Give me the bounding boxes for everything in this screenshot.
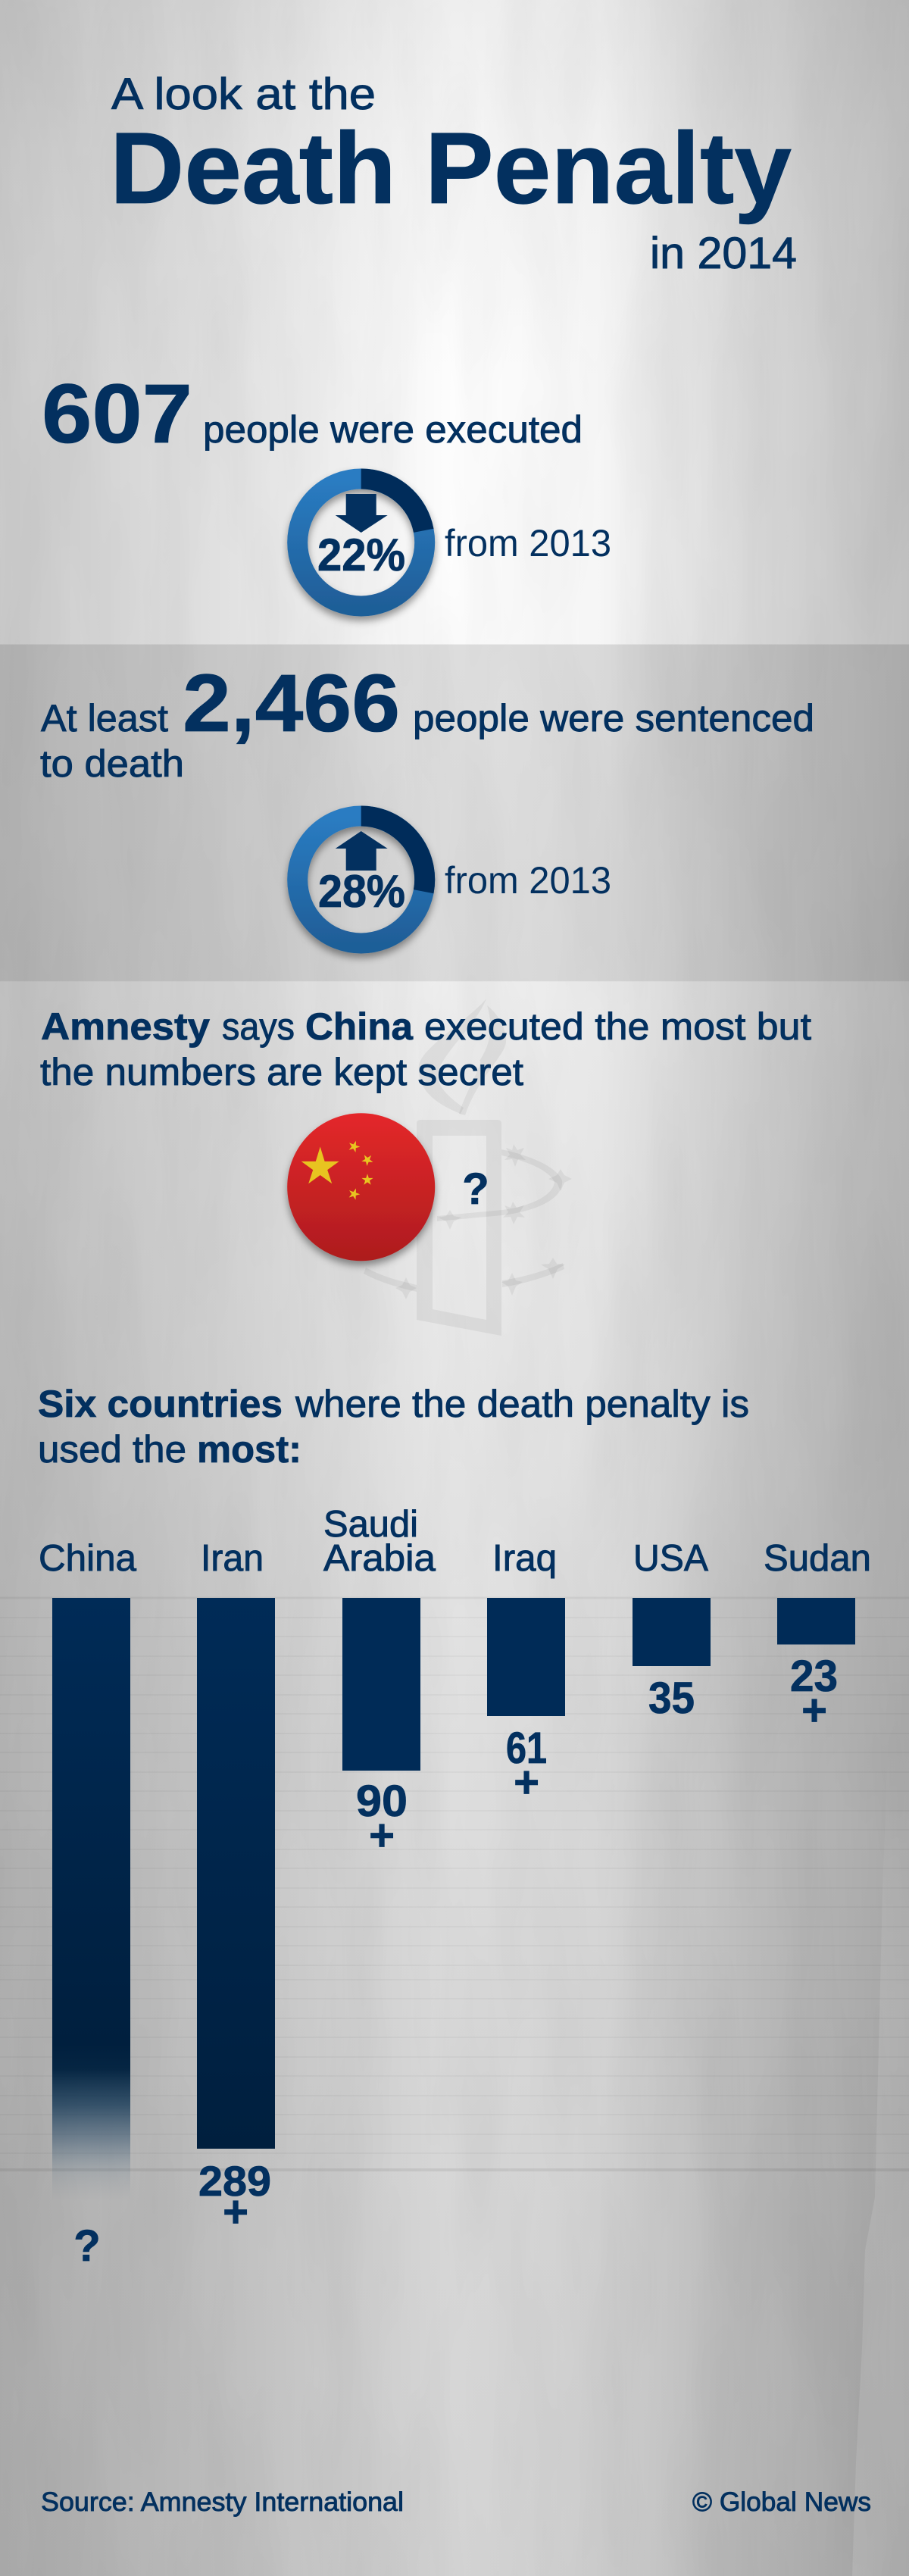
icon: Amnesty candle watermark (364, 999, 572, 1336)
title block: Death Penalty (110, 112, 792, 225)
panel: death sentences (40, 657, 814, 943)
heading: six countries: most: (197, 1428, 301, 1471)
heading: Amnesty says China executed the most (40, 1005, 811, 1093)
heading: six countries: Six countries (38, 1383, 283, 1425)
stat: at least 2,466 people were sentenced to death (40, 657, 814, 785)
title block: A look at the (111, 70, 376, 119)
stat: 607 people were executed: people were executed (203, 408, 583, 451)
bar: Sudan: Sudan (764, 1538, 871, 1579)
bar: China (39, 1538, 137, 2271)
stat: at least 2,466 people were sentenced to death: to death (40, 742, 184, 785)
heading: Amnesty says China executed the most: says (222, 1005, 295, 1048)
donut chart: up 28%: 28% (318, 866, 405, 917)
bar: Iran (197, 1538, 275, 2237)
heading: six countries: used the (38, 1428, 186, 1471)
panel: China secrecy (40, 999, 811, 1336)
title block (110, 70, 797, 278)
label: from 2013: from 2013 (445, 859, 611, 902)
heading: six countries: where the death penalty is (295, 1383, 749, 1425)
title block: in 2014 (650, 229, 797, 278)
donut chart: down 22% (298, 479, 425, 606)
source credit: Source: Amnesty International (41, 2487, 404, 2517)
stat: at least 2,466 people were sentenced to death: 2,466 (183, 657, 400, 749)
bar: Saudi Arabia: 90 (356, 1777, 408, 1826)
bar: Iraq: Iraq (492, 1538, 557, 1579)
bar: Sudan: 23 (790, 1652, 838, 1701)
bar chart: executions by country (39, 1504, 871, 2271)
bar: USA: 35 (648, 1674, 695, 1723)
stat: 607 people were executed (42, 367, 583, 461)
bar: Saudi Arabia (323, 1504, 436, 1860)
label: unknown number: ? (462, 1165, 489, 1214)
bar: China: China (39, 1538, 137, 1579)
heading: Amnesty says China executed the most: executed the most but (424, 1005, 811, 1048)
donut chart: up 28% (298, 816, 425, 943)
bar: Iraq: 61 (506, 1724, 547, 1773)
bar: Iran: 289 (198, 2157, 271, 2205)
bar: Saudi Arabia: Saudi (323, 1504, 418, 1545)
bar: USA: USA (633, 1538, 708, 1579)
bar: Saudi Arabia: + (369, 1811, 395, 1860)
stat: at least 2,466 people were sentenced to death: people were sentenced (413, 697, 814, 739)
bar: Iran: Iran (201, 1538, 264, 1579)
bar: China: ? (73, 2221, 101, 2271)
label: from 2013: from 2013 (445, 522, 611, 564)
panel: executions (42, 367, 611, 606)
stat: 607 people were executed: 607 (42, 367, 192, 461)
bar: USA (633, 1538, 711, 1723)
icon: China flag circle (287, 1113, 435, 1261)
donut chart: down 22%: 22% (317, 530, 405, 580)
bar: Sudan (764, 1538, 871, 1735)
heading: Amnesty says China executed the most: Amnesty (41, 1005, 210, 1048)
heading: Amnesty says China executed the most: the numbers are kept secret (40, 1051, 523, 1093)
copyright credit: © Global News (692, 2487, 871, 2517)
heading: Amnesty says China executed the most: China (305, 1005, 414, 1048)
bar: Iraq (487, 1538, 565, 1807)
stat: at least 2,466 people were sentenced to death: At least (41, 697, 168, 739)
bar: Saudi Arabia: Arabia (323, 1538, 436, 1579)
bar: Sudan: + (801, 1686, 827, 1735)
bar: Iran: + (223, 2187, 248, 2237)
bar: Iraq: + (514, 1758, 539, 1807)
heading: six countries (38, 1383, 749, 1471)
